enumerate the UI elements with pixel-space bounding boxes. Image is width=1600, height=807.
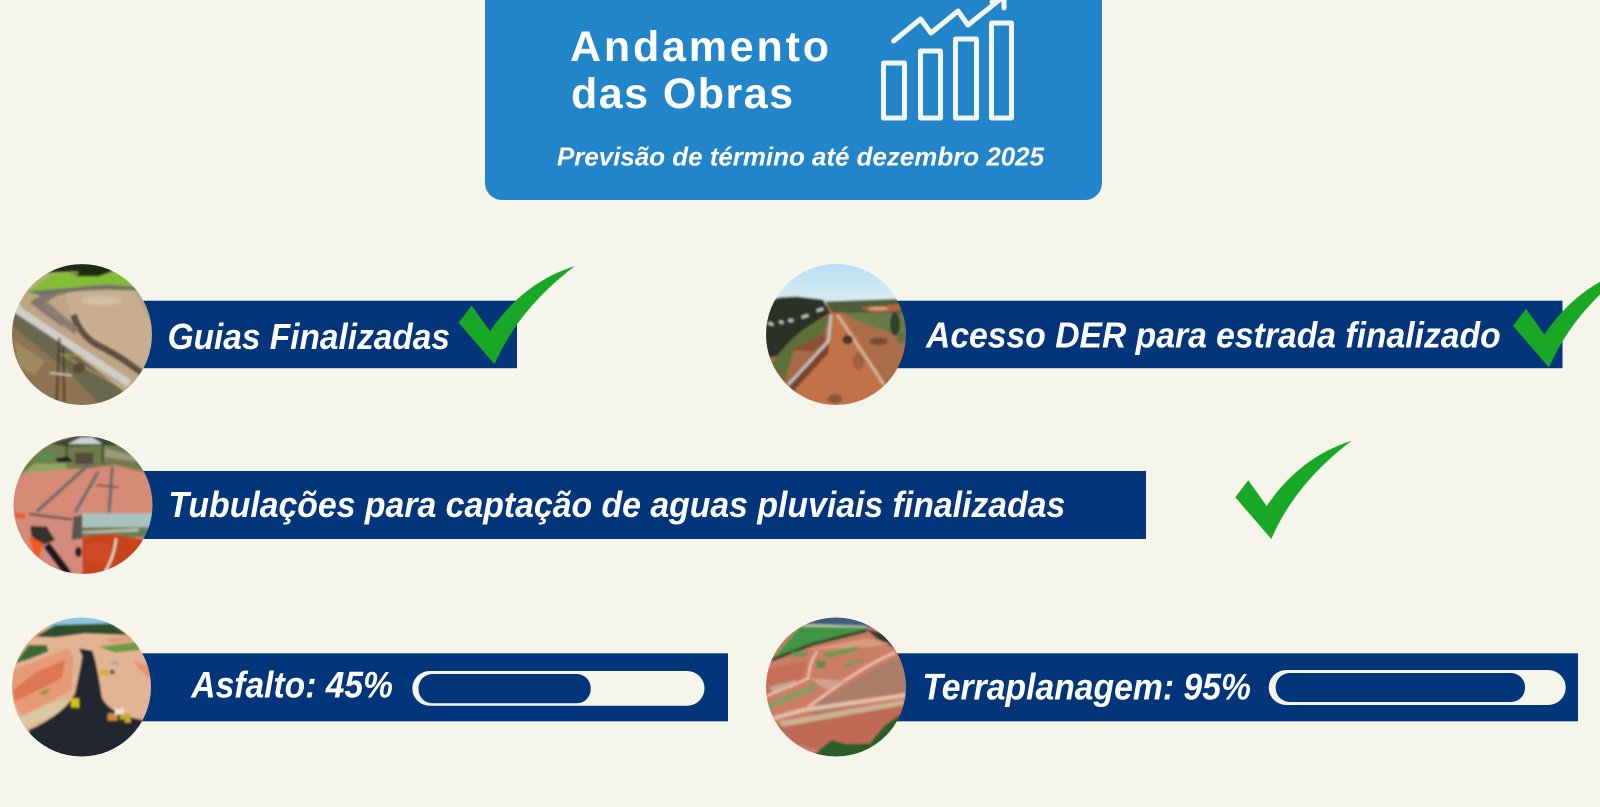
progress bar 95% xyxy=(1269,670,1566,705)
item: Acesso DER xyxy=(763,261,1600,410)
icon: rising bar chart with arrow xyxy=(884,0,1012,118)
header background xyxy=(485,0,1102,200)
label: Guias Finalizadas xyxy=(168,316,450,357)
banner xyxy=(140,301,517,368)
item: Guias Finalizadas xyxy=(8,261,575,410)
icon: green check xyxy=(1235,441,1352,539)
photo: earthworks xyxy=(766,618,906,756)
progress track xyxy=(412,671,704,706)
banner xyxy=(140,653,728,721)
progress track xyxy=(1269,670,1566,705)
label: Tubulações para captação de aguas pluviais finalizadas xyxy=(168,484,1065,525)
icon: green check xyxy=(1513,269,1600,368)
item: Asfalto 45% xyxy=(8,613,728,762)
subtitle: Previsão de término até dezembro 2025 xyxy=(557,142,1045,172)
photo: asphalt road xyxy=(12,618,151,756)
header panel xyxy=(485,0,1102,200)
item: Terraplanagem 95% xyxy=(763,613,1578,762)
title: Andamento xyxy=(570,23,829,71)
item: Tubulações xyxy=(8,433,1146,582)
banner xyxy=(140,471,1146,539)
banner xyxy=(895,301,1562,368)
banner xyxy=(895,653,1578,721)
label: Acesso DER para estrada finalizado xyxy=(925,315,1501,356)
title xyxy=(570,23,829,118)
photo: drainage pipes xyxy=(14,436,152,574)
progress bar 45% xyxy=(412,671,704,706)
progress fill xyxy=(1276,673,1525,702)
photo: access road xyxy=(766,264,906,405)
label: Asfalto: 45% xyxy=(190,665,393,706)
progress fill xyxy=(418,674,591,703)
icon: green check xyxy=(459,266,575,364)
label: Terraplanagem: 95% xyxy=(922,666,1251,707)
title: das Obras xyxy=(571,70,793,118)
photo: finished curb xyxy=(12,264,152,405)
